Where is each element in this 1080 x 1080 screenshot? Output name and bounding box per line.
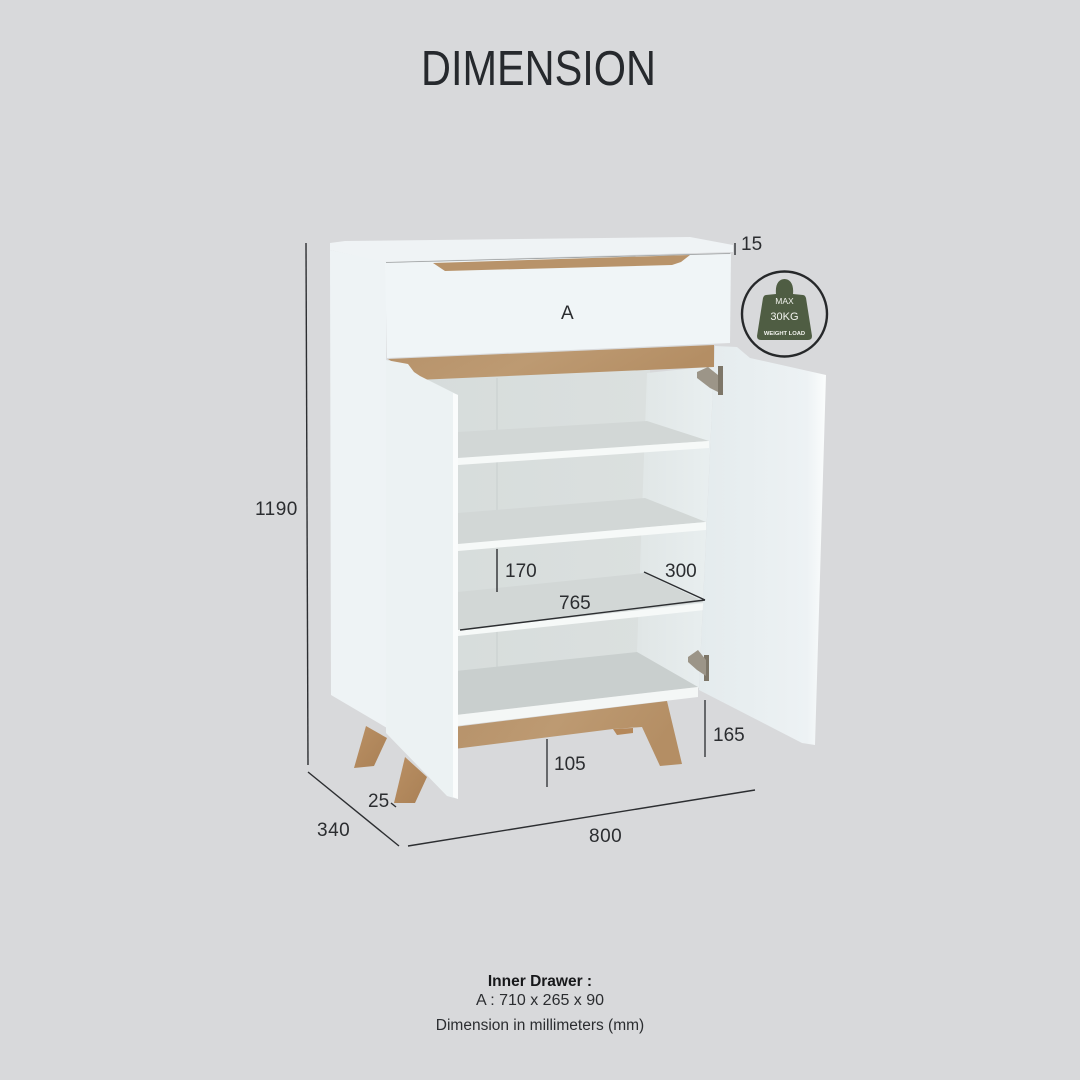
bottom shelf xyxy=(456,652,698,726)
dimension labels: 25 xyxy=(368,791,389,812)
interior right wall xyxy=(637,366,714,688)
cabinet interior back wall xyxy=(415,368,650,675)
weight load badge: MAX xyxy=(775,296,794,306)
dimension labels: 105 xyxy=(554,754,586,775)
top hinge xyxy=(697,366,723,395)
dimension lines xyxy=(306,243,755,846)
dimension labels: 15 xyxy=(741,234,762,255)
drawer front A xyxy=(385,254,731,358)
dimension labels: 165 xyxy=(713,725,745,746)
title: DIMENSION xyxy=(421,42,656,96)
inner drawer note: A : 710 x 265 x 90 xyxy=(476,992,604,1009)
weight load badge xyxy=(742,272,827,356)
inner drawer note: Inner Drawer : xyxy=(488,973,592,990)
dimension labels: 800 xyxy=(589,826,622,847)
weight load badge: WEIGHT LOAD xyxy=(764,331,805,337)
inner drawer note xyxy=(436,973,644,1034)
cabinet illustration xyxy=(330,237,826,803)
shelf 2 xyxy=(458,498,706,551)
inner drawer note: Dimension in millimeters (mm) xyxy=(436,1017,644,1034)
left side panel xyxy=(330,250,387,728)
dimension labels: 340 xyxy=(317,820,350,841)
left door xyxy=(386,360,458,799)
dimension labels: 765 xyxy=(559,593,591,614)
weight icon xyxy=(757,279,812,340)
dimension labels: 300 xyxy=(665,561,697,582)
bottom hinge xyxy=(688,650,709,681)
right door xyxy=(699,346,826,745)
wooden base frame xyxy=(454,701,682,766)
dimension labels xyxy=(255,234,762,847)
dimension labels: A xyxy=(561,303,574,324)
back left leg xyxy=(354,726,387,768)
shelf 3 xyxy=(458,573,705,636)
cabinet top xyxy=(330,237,733,262)
front left leg xyxy=(394,757,427,803)
weight load badge: 30KG xyxy=(770,311,799,323)
shelf 1 xyxy=(458,421,709,465)
dimension labels: 170 xyxy=(505,561,537,582)
drawer wood rail xyxy=(388,345,714,380)
dimension labels: 1190 xyxy=(255,499,298,520)
